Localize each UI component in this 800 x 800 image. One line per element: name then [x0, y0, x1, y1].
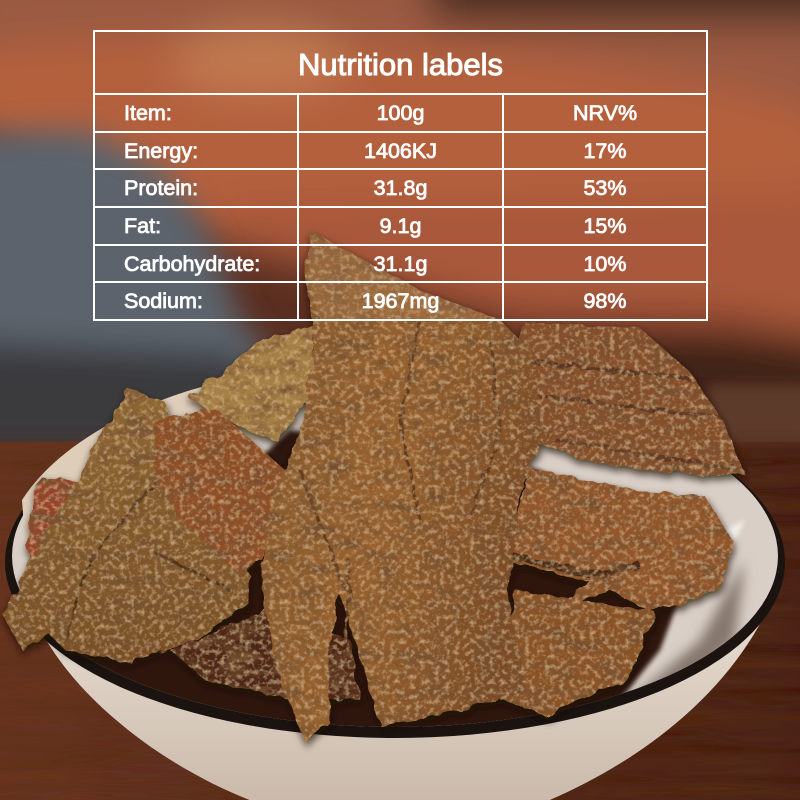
shadow under the jerky: [60, 430, 690, 735]
bowl: pale upper-left rim: [22, 378, 300, 610]
row: header: NRV%: [573, 101, 637, 125]
row: protein: Protein:: [124, 176, 198, 200]
row: header: 100g: [377, 101, 424, 125]
row: carbohydrate: Carbohydrate:: [124, 252, 260, 276]
jerky: left reddish: [155, 408, 285, 575]
jerky: red small left: [25, 476, 88, 562]
row: sodium: 1967mg: [362, 289, 439, 313]
pale wash over the top of the centre piece: [308, 235, 500, 322]
white bowl: [5, 378, 785, 800]
row: carbohydrate: [124, 252, 627, 276]
row: fat: Fat:: [124, 214, 161, 238]
row: energy: 17%: [583, 139, 627, 163]
jerky: lower dark: [170, 610, 360, 700]
row: header: Item:: [124, 101, 172, 125]
row: fat: 9.1g: [380, 214, 421, 238]
row: carbohydrate: 31.1g: [374, 252, 427, 276]
row: carbohydrate: 10%: [583, 252, 627, 276]
jerky: left large: [3, 388, 250, 662]
row: fat: 15%: [583, 214, 627, 238]
row: sodium: [124, 289, 627, 313]
jerky: back right: [510, 322, 746, 476]
bowl: highlight: [726, 520, 744, 544]
jerky pieces: [3, 232, 746, 742]
jerky: lower right: [500, 590, 655, 716]
jerky: centre main: [260, 232, 543, 742]
table title: Nutrition labels: [298, 47, 503, 82]
row: energy: Energy:: [124, 139, 198, 163]
bowl: shaded right interior: [630, 560, 745, 700]
row: energy: [124, 139, 627, 163]
row: sodium: Sodium:: [124, 289, 203, 313]
nutrition table: [93, 30, 708, 321]
jerky: right middle: [505, 468, 733, 612]
row: protein: 53%: [583, 176, 627, 200]
wooden table: [0, 385, 800, 800]
jerky: back left: [188, 325, 315, 442]
row: fat: [124, 214, 627, 238]
row: protein: [124, 176, 627, 200]
row: energy: 1406KJ: [364, 139, 437, 163]
row: sodium: 98%: [583, 289, 627, 313]
row: protein: 31.8g: [374, 176, 427, 200]
row: header: [124, 101, 637, 125]
